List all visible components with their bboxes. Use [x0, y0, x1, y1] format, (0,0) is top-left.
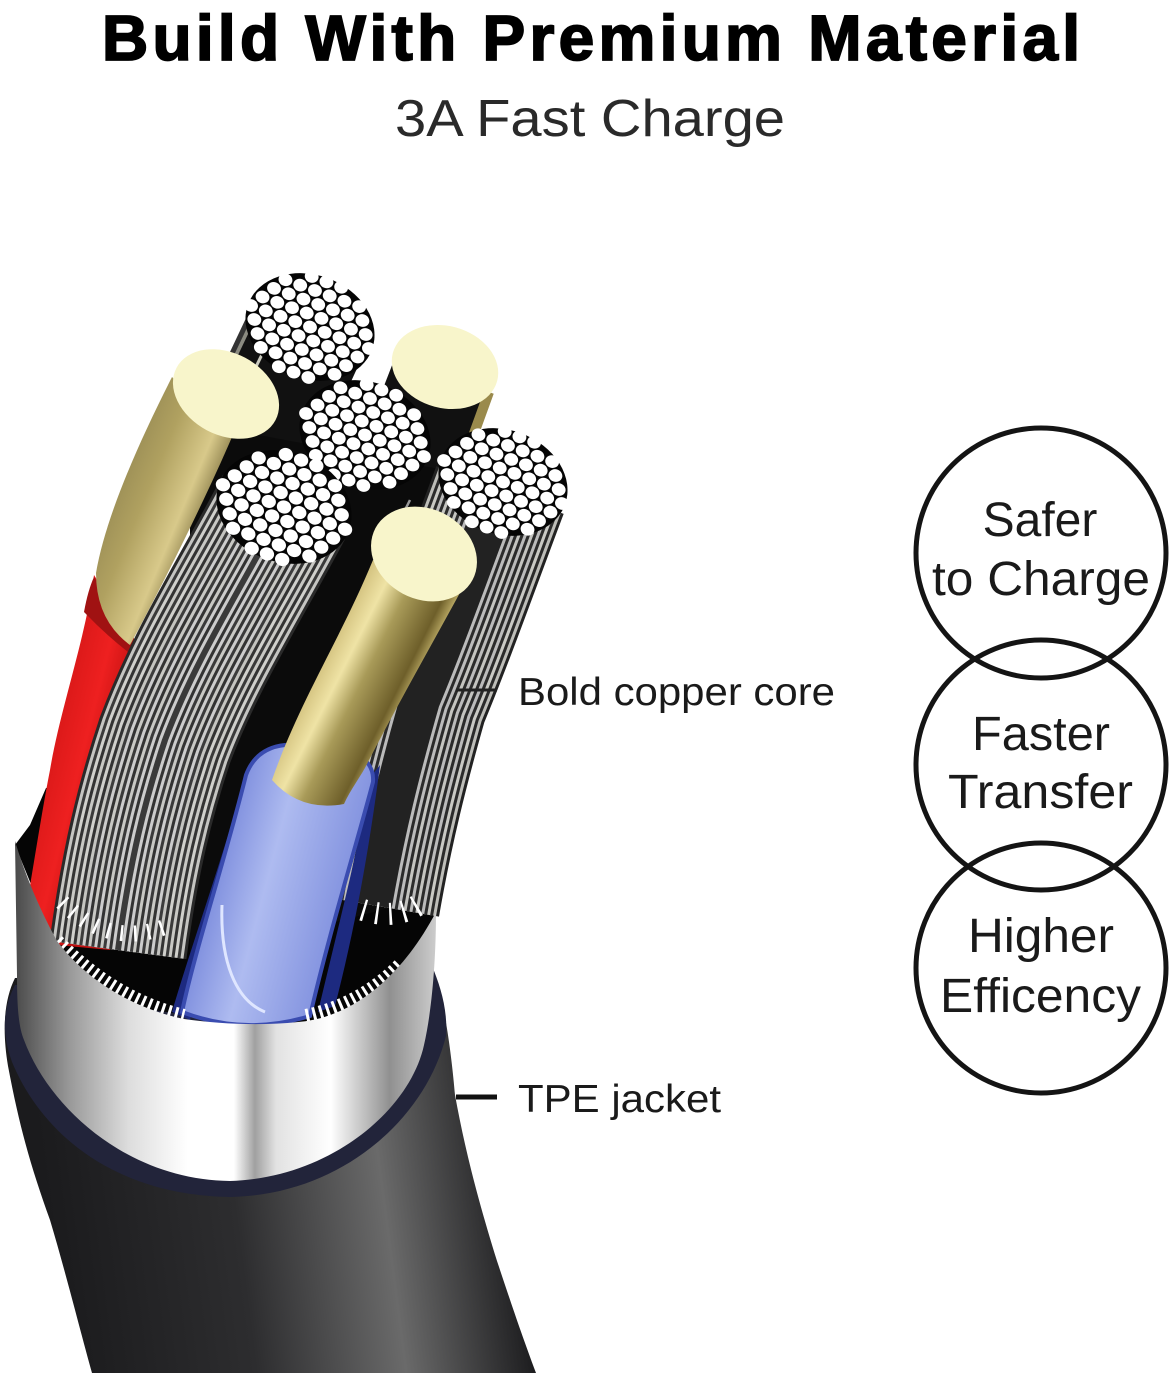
benefit: higher efficiency	[916, 843, 1166, 1093]
black cable opening	[15, 760, 436, 1032]
right stranded bundle	[372, 411, 583, 905]
navy jacket collar	[5, 966, 446, 1197]
back gold conductor	[382, 313, 508, 470]
center stranded bundle	[190, 362, 490, 960]
top stranded bundle	[205, 256, 390, 480]
callout: bold copper core: Bold copper core	[518, 671, 835, 714]
subtitle: 3A Fast Charge	[395, 90, 785, 148]
benefit: safer to charge: to Charge	[932, 553, 1150, 606]
benefit: faster transfer	[916, 640, 1166, 890]
frayed strand ends	[62, 900, 425, 934]
callout: TPE jacket: TPE jacket	[518, 1078, 721, 1121]
cable illustration	[5, 256, 583, 1373]
frayed strand tips	[57, 941, 400, 1016]
title: Build With Premium Material	[102, 2, 1080, 74]
benefit: higher efficiency: Efficency	[940, 970, 1141, 1023]
benefit: safer to charge: Safer	[983, 494, 1097, 547]
TPE jacket body	[5, 966, 536, 1373]
benefit: faster transfer: Faster	[972, 708, 1110, 761]
red insulated wire with gold conductor	[30, 332, 295, 950]
blue insulated wire with gold conductor	[172, 488, 494, 1025]
benefit: safer to charge	[916, 428, 1166, 678]
front stranded bundle	[118, 432, 368, 950]
silver shield ring	[15, 841, 436, 1181]
benefit: higher efficiency: Higher	[968, 910, 1114, 963]
benefit: faster transfer: Transfer	[948, 766, 1133, 819]
